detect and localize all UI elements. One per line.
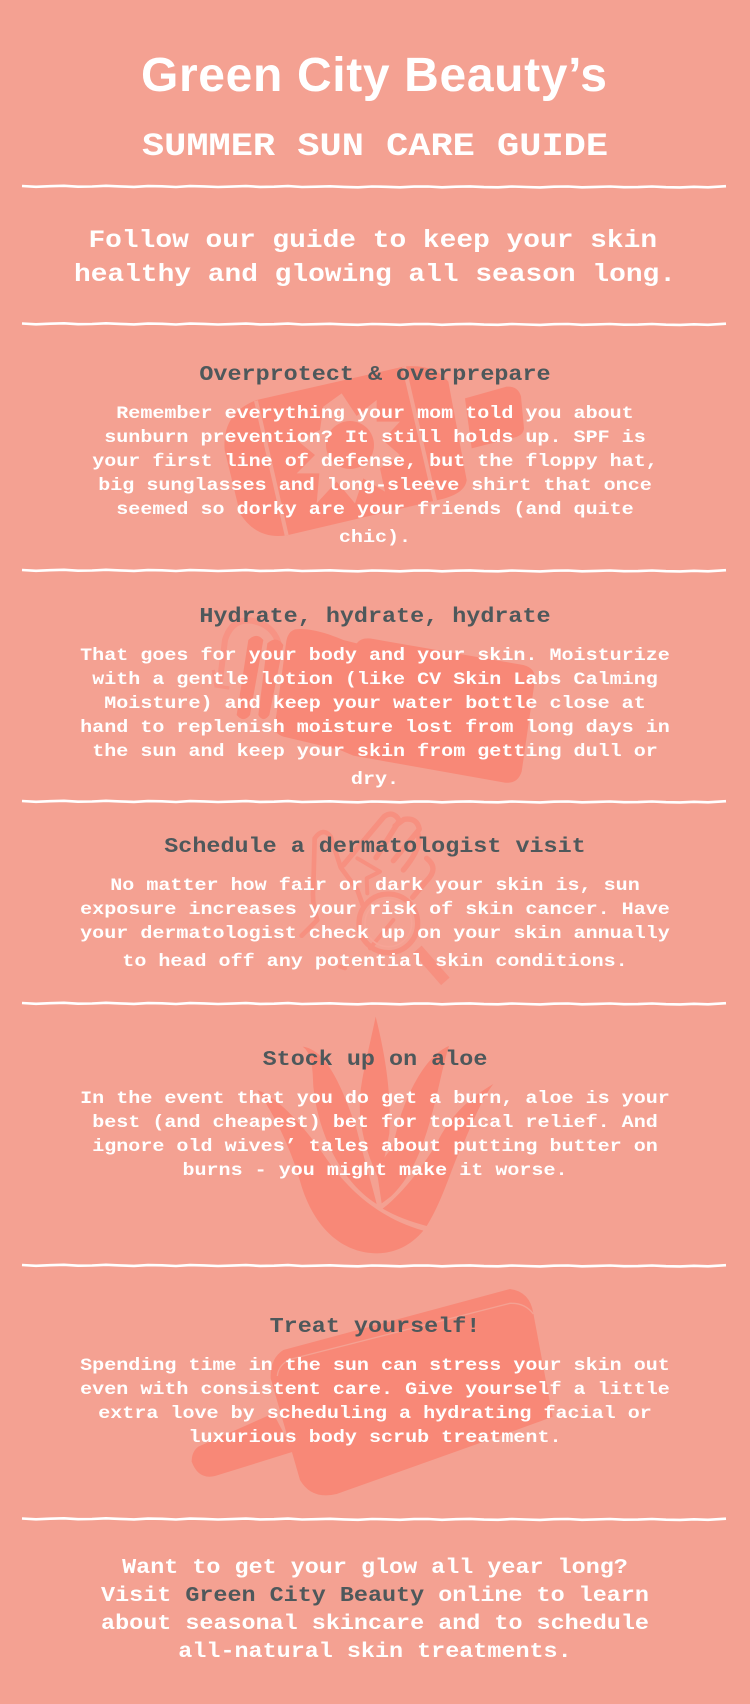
icon: sunscreen tube [224, 366, 524, 536]
heading: hydrate: Hydrate, hydrate, hydrate [199, 604, 551, 629]
heading: aloe: Stock up on aloe [263, 1047, 487, 1072]
heading: dermatologist: Schedule a dermatologist visit [164, 834, 586, 859]
body text: aloe: ignore old wives’ tales about putting butter on [92, 1136, 658, 1157]
divider lines [22, 186, 726, 1520]
body text: hydrate: hand to replenish moisture lost from long days in [80, 717, 670, 738]
footer call to action: Visit Green City Beauty online to learn [101, 1583, 649, 1608]
body text: aloe [80, 1088, 670, 1181]
icon: soap bar on stick [192, 1289, 553, 1495]
icon: hand with magnifier [302, 814, 445, 981]
body text: aloe: burns - you might make it worse. [182, 1160, 568, 1181]
body text: dermatologist: to head off any potential skin conditions. [122, 951, 628, 972]
body text: treat yourself: Spending time in the sun can stress your skin out [80, 1355, 670, 1376]
body text: hydrate: That goes for your body and your skin. Moisturize [80, 645, 670, 666]
title: Green City Beauty’s [141, 49, 607, 102]
body text: dermatologist: your dermatologist check up on your skin annually [80, 923, 670, 944]
footer call to action: all-natural skin treatments. [178, 1639, 572, 1664]
body text: overprotect [92, 403, 658, 548]
section 1: overprotect [92, 362, 658, 548]
section 5: treat yourself [80, 1314, 670, 1448]
intro text: Follow our guide to keep your skin [88, 226, 657, 255]
body text: overprotect: Remember everything your mom told you about [116, 403, 634, 424]
body text: hydrate: the sun and keep your skin from getting dull or [92, 741, 658, 762]
section 4: aloe [80, 1047, 670, 1181]
icon: aloe plant [257, 1017, 493, 1253]
body text: treat yourself: extra love by scheduling a hydrating facial or [98, 1403, 652, 1424]
intro text [74, 226, 676, 289]
body text: hydrate [80, 645, 670, 790]
body text: overprotect: chic). [339, 527, 411, 548]
body text: overprotect: sunburn prevention? It still holds up. SPF is [104, 427, 646, 448]
body text: hydrate: dry. [351, 769, 399, 790]
body text: overprotect: big sunglasses and long-sleeve shirt that once [98, 475, 652, 496]
footer call to action: Want to get your glow all year long? [122, 1555, 628, 1580]
heading: overprotect: Overprotect & overprepare [199, 362, 551, 387]
body text: treat yourself: luxurious body scrub treatment. [188, 1427, 562, 1448]
footer call to action [101, 1555, 649, 1664]
body text: hydrate: Moisture) and keep your water bottle close at [104, 693, 646, 714]
icon: lotion bottle [213, 620, 535, 783]
body text: dermatologist: No matter how fair or dark your skin is, sun [110, 875, 640, 896]
body text: hydrate: with a gentle lotion (like CV Skin Labs Calming [92, 669, 658, 690]
body text: overprotect: your first line of defense, but the floppy hat, [92, 451, 658, 472]
body text: treat yourself [80, 1355, 670, 1448]
body text: dermatologist: exposure increases your risk of skin cancer. Have [80, 899, 670, 920]
body text: overprotect: seemed so dorky are your friends (and quite [116, 499, 634, 520]
heading: treat yourself: Treat yourself! [270, 1314, 480, 1339]
subtitle: SUMMER SUN CARE GUIDE [142, 129, 608, 165]
body text: dermatologist [80, 875, 670, 972]
body text: aloe: In the event that you do get a burn, aloe is your [80, 1088, 670, 1109]
footer call to action: about seasonal skincare and to schedule [101, 1611, 649, 1636]
section 3: dermatologist [80, 834, 670, 972]
body text: treat yourself: even with consistent care. Give yourself a little [80, 1379, 670, 1400]
section 2: hydrate [80, 604, 670, 790]
body text: aloe: best (and cheapest) bet for topical relief. And [92, 1112, 658, 1133]
intro text: healthy and glowing all season long. [74, 260, 676, 289]
